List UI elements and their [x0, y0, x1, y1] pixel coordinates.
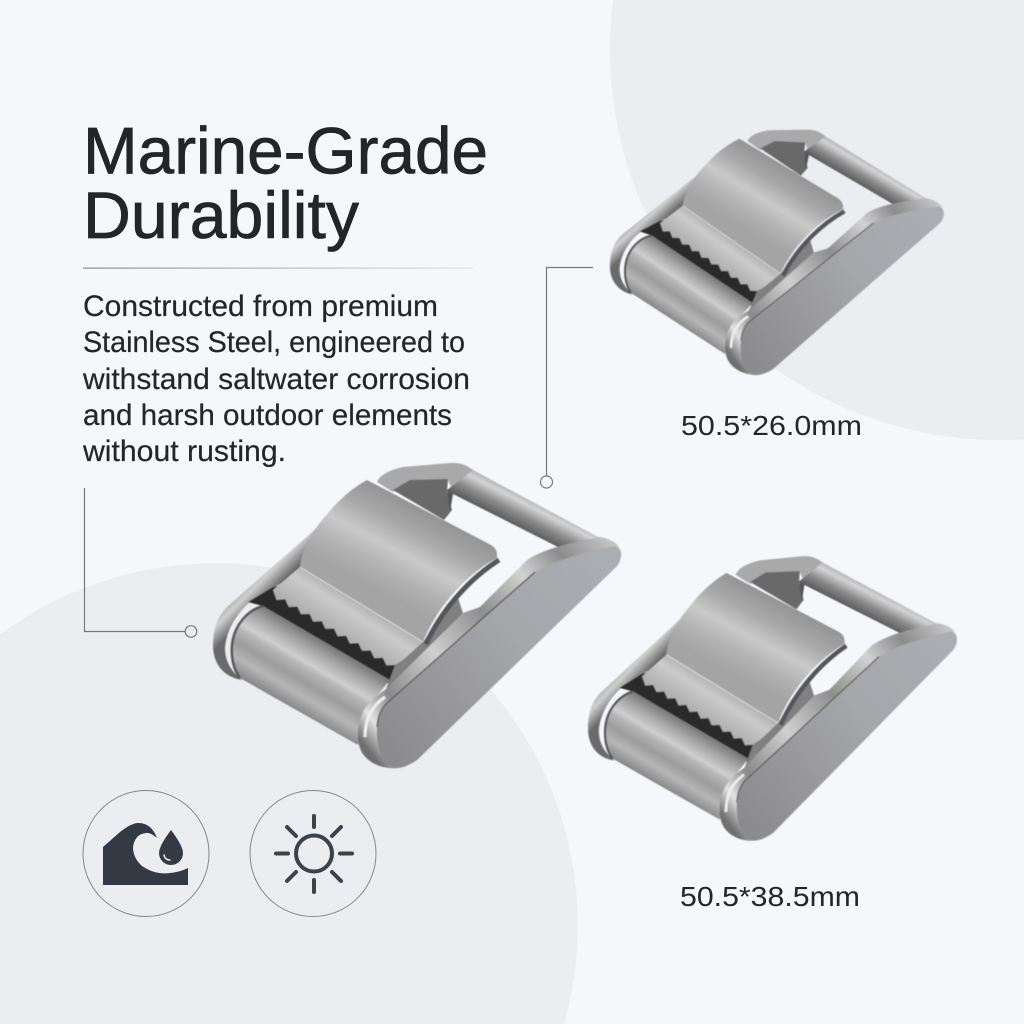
body text: without rusting. — [82, 435, 286, 468]
callout line: large buckle — [84, 488, 197, 637]
body text: and harsh outdoor elements — [83, 399, 452, 432]
body text: withstand saltwater corrosion — [82, 363, 470, 396]
body text: Constructed from premium — [83, 290, 438, 323]
title — [83, 114, 488, 252]
title: Marine-Grade — [83, 114, 488, 188]
background circle: bottom left — [0, 563, 578, 1024]
body text: Stainless Steel, engineered to — [83, 326, 465, 359]
size label: top buckle: 50.5*26.0mm — [681, 410, 862, 441]
size label: lower buckle: 50.5*38.5mm — [680, 881, 860, 912]
buckle: lower right — [587, 554, 958, 843]
icon: sun — [250, 790, 376, 916]
callout line: top buckle — [540, 268, 593, 488]
buckle: top right — [607, 116, 946, 388]
title: Durability — [83, 178, 359, 252]
body text — [82, 290, 470, 468]
background circle: top right — [610, 0, 1024, 440]
buckle: large centre — [213, 463, 621, 768]
icon: wave and water drop — [83, 790, 209, 916]
